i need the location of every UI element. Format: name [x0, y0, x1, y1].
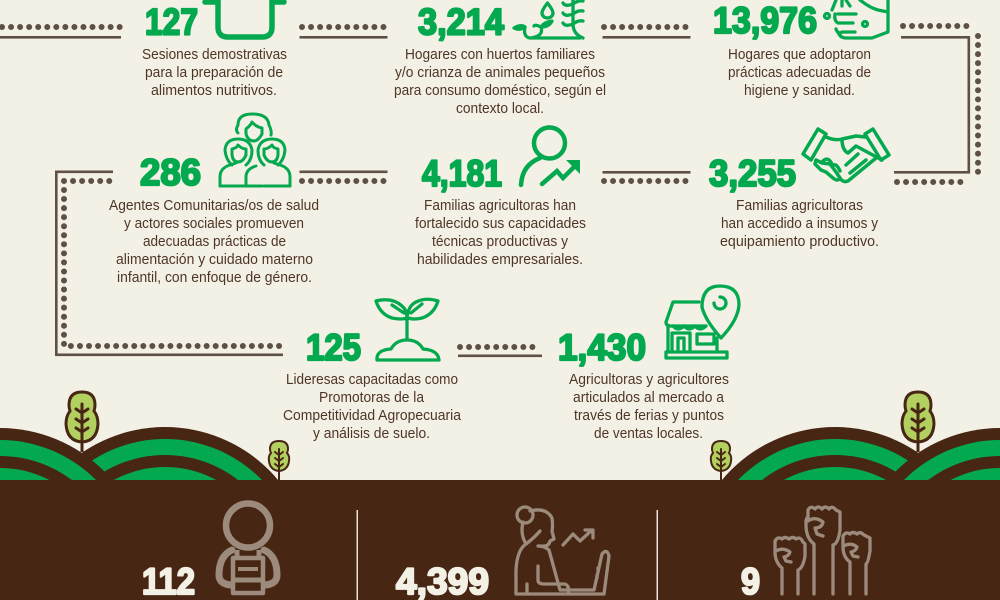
description: Agentes Comunitarias/os de salud: [109, 198, 319, 214]
description: y actores sociales promueven: [124, 216, 304, 232]
description: articulados al mercado a: [573, 390, 725, 406]
description: de ventas locales.: [594, 426, 703, 442]
icon: three women: [220, 114, 290, 186]
description: Sesiones demostrativas: [142, 47, 287, 63]
icon: handshake: [803, 129, 889, 182]
description: prácticas adecuadas de: [728, 65, 871, 81]
description: para la preparación de: [145, 65, 283, 81]
item: hygiene households: [713, 0, 888, 99]
hills and trees, right: [688, 392, 1000, 600]
item: women promoters: [283, 299, 462, 442]
description: y análisis de suelo.: [313, 426, 430, 442]
item: technical capacities: [415, 128, 586, 268]
description: contexto local.: [456, 101, 544, 117]
description: [415, 198, 586, 268]
description: Hogares con huertos familiares: [405, 47, 595, 63]
description: [142, 47, 287, 99]
number: 13,976: 13,976: [713, 0, 817, 41]
description: alimentos nutritivos.: [151, 83, 277, 99]
description: Lideresas capacitadas como: [286, 372, 458, 388]
number: 4,181: 4,181: [422, 153, 502, 194]
item: household gardens: [394, 0, 606, 117]
description: Familias agricultoras: [736, 198, 863, 214]
description: habilidades empresariales.: [417, 252, 583, 268]
description: equipamiento productivo.: [720, 234, 879, 250]
item: demonstration sessions: [142, 0, 287, 99]
item: productive inputs: [709, 129, 889, 250]
icon: person with growth arrow: [521, 128, 580, 185]
icon: garden plants: [514, 0, 583, 38]
description: [283, 372, 462, 442]
description: Hogares que adoptaron: [728, 47, 871, 63]
description: higiene y sanidad.: [744, 83, 855, 99]
description: [720, 198, 879, 250]
description: [569, 372, 729, 442]
description: [109, 198, 319, 286]
icon: cooking pot: [205, 0, 284, 37]
description: [394, 47, 606, 117]
icon: store and location pin: [666, 286, 739, 358]
description: han accedido a insumos y: [721, 216, 879, 232]
item: community health agents: [109, 114, 319, 286]
hills and trees, left: [0, 392, 312, 600]
item: local markets: [558, 286, 739, 442]
icon: seedling: [376, 299, 439, 360]
description: Agricultoras y agricultores: [569, 372, 729, 388]
description: alimentación y cuidado materno: [116, 252, 313, 268]
description: través de ferias y puntos: [574, 408, 724, 424]
number: 3,255: 3,255: [709, 153, 796, 194]
number: 286: 286: [140, 152, 201, 193]
icon: washing hands: [824, 0, 888, 38]
description: técnicas productivas y: [432, 234, 569, 250]
icon: woman with laptop: [516, 507, 609, 594]
description: para consumo doméstico, según el: [394, 83, 606, 99]
description: fortalecido sus capacidades: [415, 216, 586, 232]
panel: bottom brown band: [0, 480, 1000, 600]
description: Competitividad Agropecuaria: [283, 408, 462, 424]
description: Familias agricultoras han: [424, 198, 576, 214]
description: Promotoras de la: [319, 390, 425, 406]
description: [728, 47, 871, 99]
number: 127: 127: [145, 2, 198, 42]
description: infantil, con enfoque de género.: [117, 270, 312, 286]
description: y/o crianza de animales pequeños: [395, 65, 605, 81]
number: 3,214: 3,214: [418, 2, 504, 42]
description: adecuadas prácticas de: [143, 234, 286, 250]
number: 125: 125: [306, 327, 361, 368]
icon: raised fists: [775, 507, 870, 594]
number: 1,430: 1,430: [558, 327, 646, 368]
icon: person with apron: [219, 504, 277, 593]
